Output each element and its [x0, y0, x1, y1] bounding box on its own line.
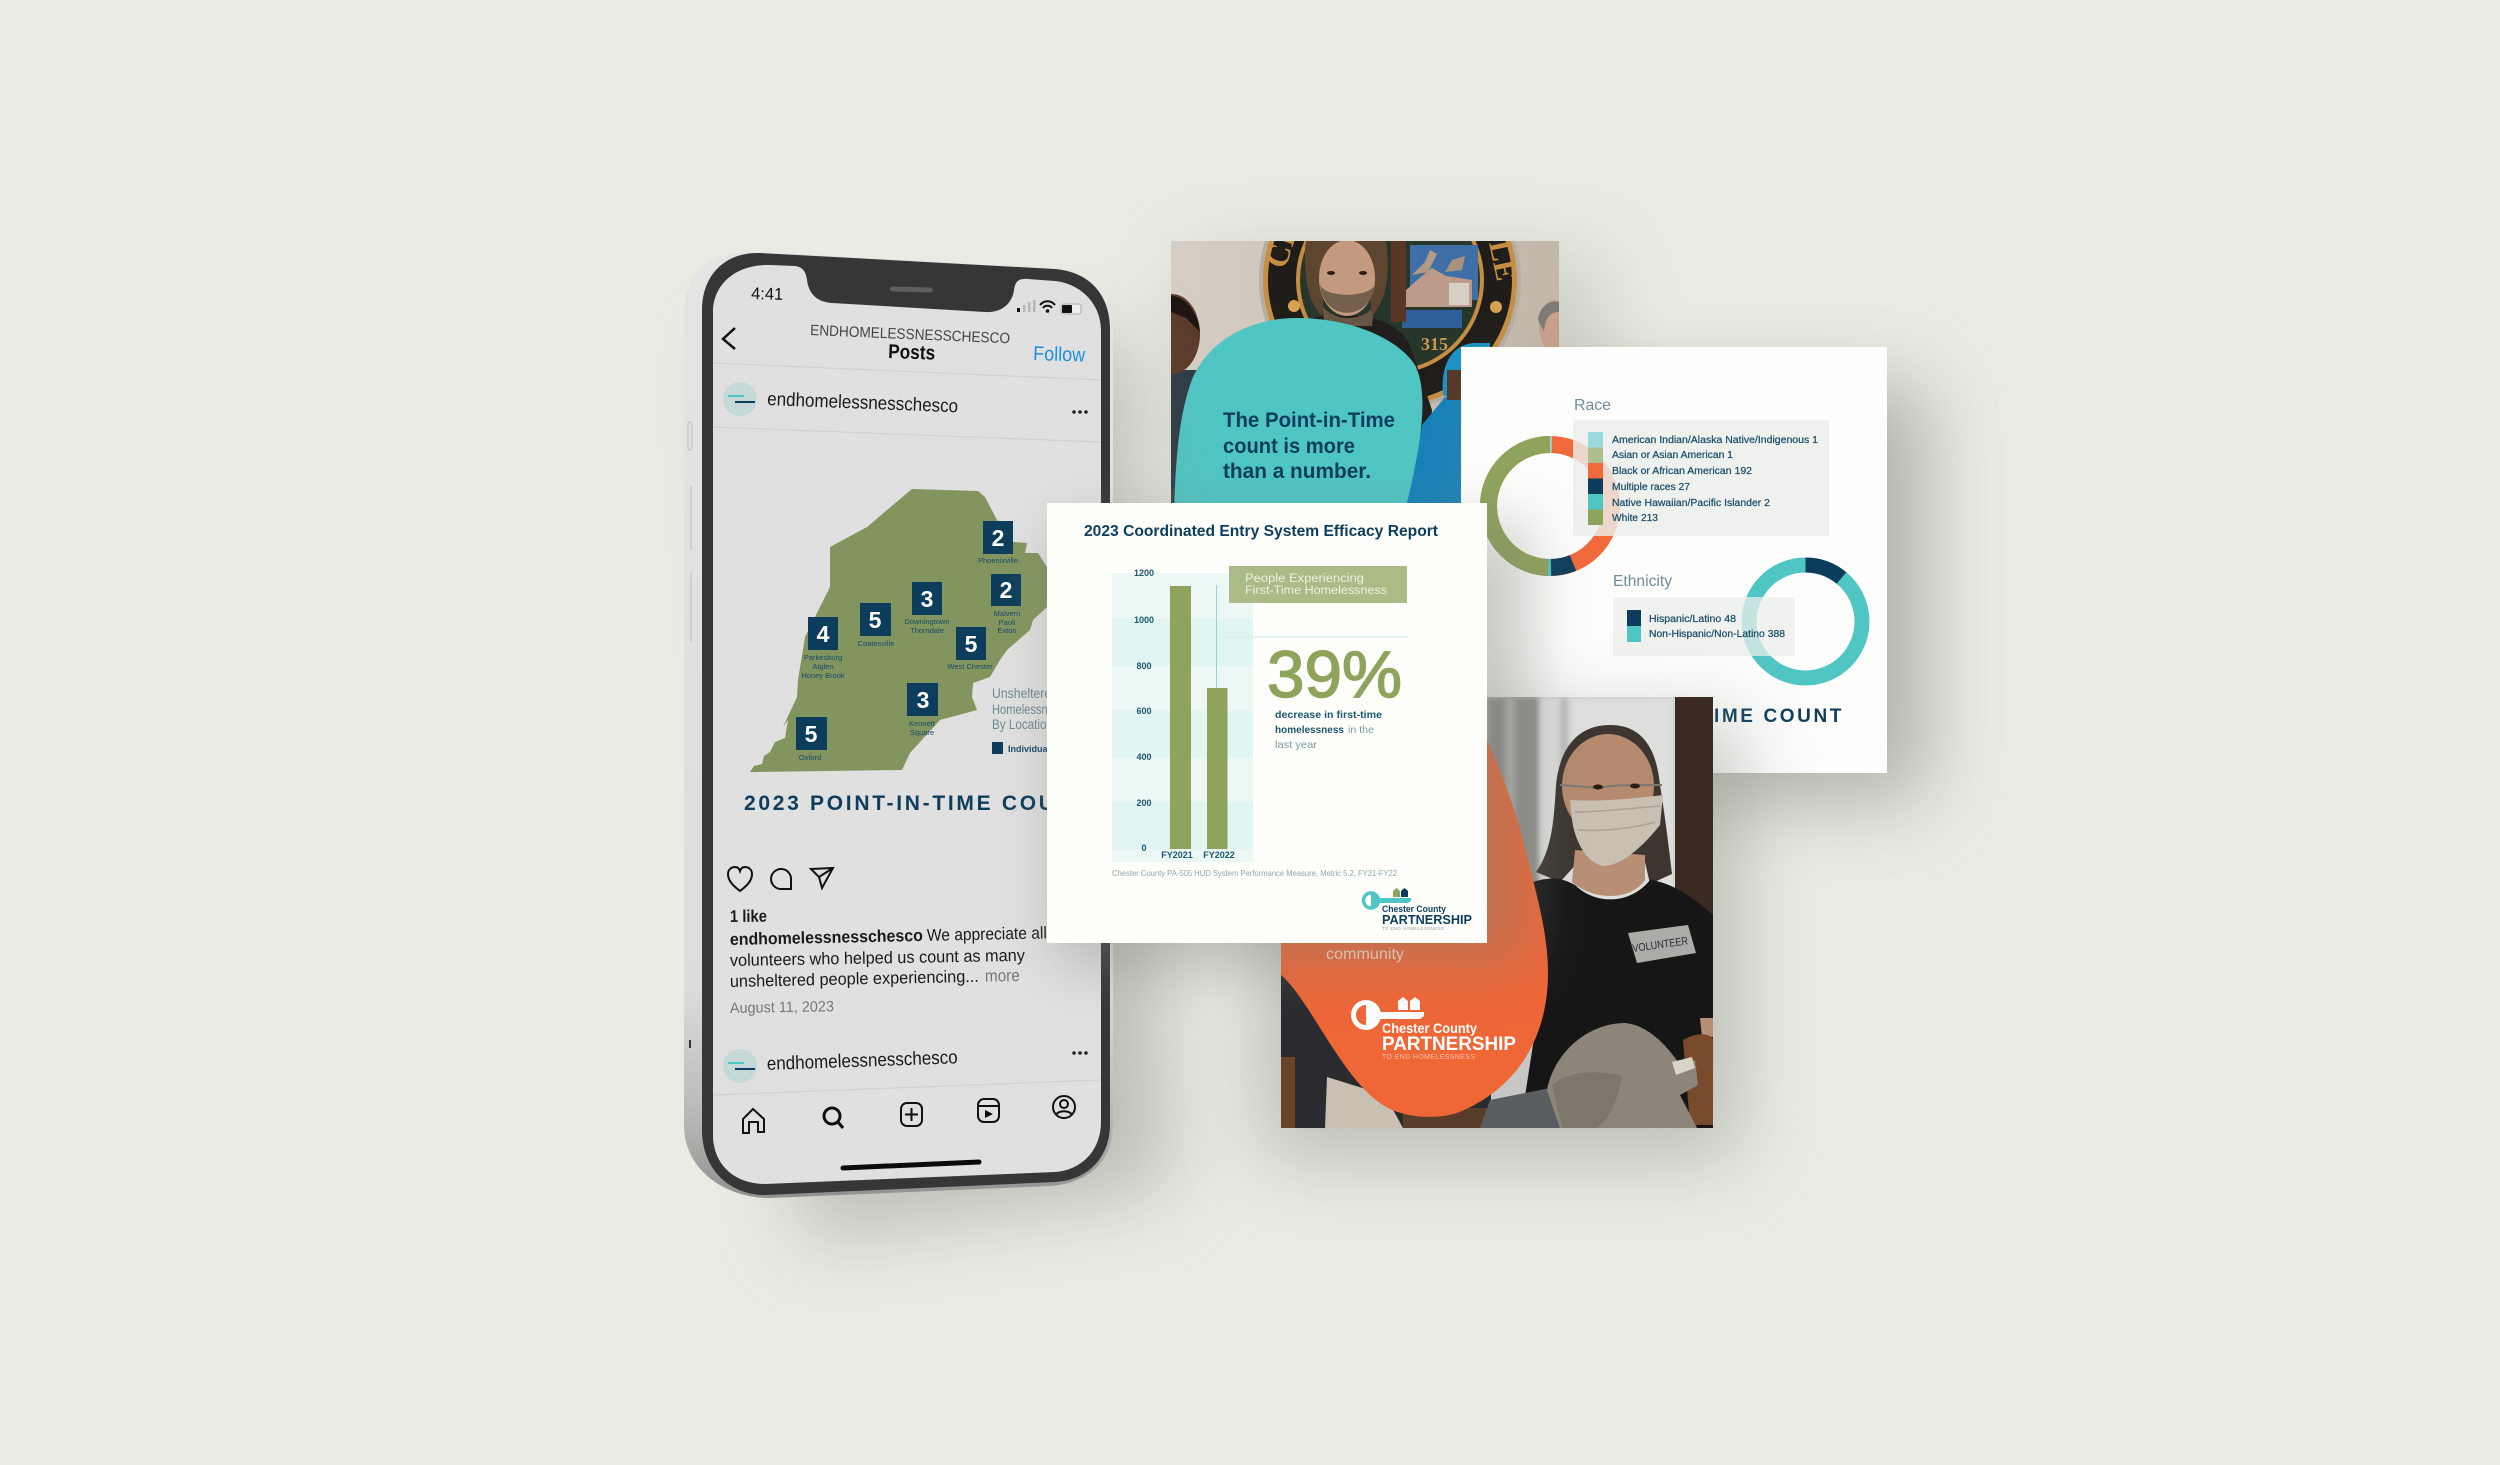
- post caption: [730, 907, 1047, 1017]
- post author row: [723, 382, 1088, 417]
- icon: city seal: LE: [1482, 238, 1523, 284]
- icon: comment: [771, 869, 791, 889]
- map marker: Parkesburg: Atglen: [812, 662, 834, 671]
- bar: FY2021: [1170, 586, 1191, 849]
- text: point-in-time statement: count is more: [1223, 435, 1355, 458]
- map marker: Malvern: Paoli: [999, 618, 1016, 627]
- phone mockup: [684, 252, 1113, 1198]
- bar chart: FY2022: [1203, 850, 1235, 860]
- legend: ethnicity: [1613, 597, 1795, 656]
- donut chart: race: [1478, 444, 1612, 568]
- woman in blue: [1405, 343, 1490, 511]
- legend: race: Native Hawaiian/Pacific Islander 2: [1612, 498, 1770, 509]
- icon: city seal: [1259, 241, 1521, 404]
- bar chart: FY2021: [1161, 850, 1193, 860]
- map marker: Downingtown: Downingtown: [904, 617, 950, 626]
- bar chart: 1200: [1134, 568, 1154, 578]
- callout: chart label: [1229, 566, 1407, 603]
- legend: race: Multiple races 27: [1612, 482, 1690, 493]
- bar chart: 1000: [1134, 615, 1154, 625]
- header: Follow: [1033, 343, 1086, 367]
- map marker: Coatesville: 5: [869, 607, 882, 633]
- card shadow: efficacy report: [1055, 525, 1530, 965]
- post caption: unsheltered people experiencing...: [730, 967, 979, 991]
- man in centre: [1305, 241, 1432, 435]
- stat description: [1275, 709, 1382, 751]
- map marker: Malvern: Malvern: [994, 609, 1020, 618]
- logo: white partnership key: Chester County: [1382, 1020, 1477, 1036]
- panel: efficacy report: [1047, 503, 1487, 943]
- post author row: endhomelessnesschesco: [767, 389, 958, 417]
- bar chart: 200: [1136, 798, 1152, 808]
- logo: white partnership key: [1354, 997, 1516, 1061]
- map marker: Kennett Square: Square: [910, 728, 934, 737]
- map marker: Kennett Square: 3: [917, 687, 929, 713]
- phone shadow: [730, 340, 1170, 1240]
- phone screen: [713, 265, 1101, 1184]
- map marker: West Chester: 5: [965, 631, 978, 657]
- map marker: Oxford: Oxford: [799, 753, 821, 762]
- legend: race: White 213: [1612, 513, 1658, 524]
- logo: partnership key: Chester County: [1382, 904, 1447, 915]
- map marker: Coatesville: [858, 603, 894, 648]
- text: point-in-time statement: The Point-in-Time: [1223, 409, 1395, 432]
- bar chart: [1112, 568, 1407, 862]
- bottom navigation icons: [743, 1096, 1075, 1133]
- map marker: Parkesburg: 4: [817, 621, 830, 647]
- map marker: Oxford: [796, 717, 827, 762]
- next post author row: [713, 1047, 1101, 1095]
- post caption: more: [985, 966, 1020, 986]
- header: ENDHOMELESSNESSCHESCO: [810, 322, 1010, 347]
- status bar: 4:41: [751, 284, 783, 304]
- speaker: [890, 286, 933, 293]
- logo: white partnership key: PARTNERSHIP: [1382, 1034, 1516, 1055]
- callout: chart label: First-Time Homelessness: [1245, 585, 1387, 597]
- map marker: Parkesburg: Parkesburg: [804, 653, 842, 662]
- man on the right: [1538, 300, 1559, 347]
- bar chart: 400: [1136, 752, 1152, 762]
- header: [713, 322, 1101, 442]
- bar chart: 600: [1136, 706, 1152, 716]
- logo: white partnership key: TO END HOMELESSNESS: [1382, 1054, 1475, 1061]
- map marker: Phoenixville: Phoenixville: [978, 556, 1018, 565]
- map legend: Unsheltered: [992, 686, 1058, 701]
- bar chart: 800: [1136, 661, 1152, 671]
- map legend: [992, 686, 1065, 754]
- stat description: last year: [1275, 739, 1318, 751]
- card shadow: portrait photo: [1185, 255, 1605, 525]
- map marker: Phoenixville: [978, 521, 1018, 565]
- map marker: Malvern: Exton: [997, 626, 1017, 635]
- logo: partnership key: TO END HOMELESSNESS: [1382, 926, 1444, 931]
- panel: point-in-time photo card: [1171, 241, 1559, 503]
- map marker: Downingtown: 3: [921, 586, 933, 612]
- map marker: West Chester: [947, 627, 993, 671]
- map marker: Oxford: 5: [805, 721, 818, 747]
- icon: share: [811, 868, 833, 888]
- map legend: Individuals: [1008, 744, 1055, 754]
- bar: FY2022: [1207, 688, 1228, 849]
- phone frame: [702, 253, 1110, 1195]
- card shadow: volunteer photo: [1260, 720, 1740, 1160]
- woman volunteer: [1520, 725, 1713, 1128]
- text: community: community: [1326, 946, 1404, 963]
- map marker: Downingtown: [904, 582, 950, 635]
- logo: partnership key: PARTNERSHIP: [1382, 912, 1472, 927]
- home indicator: [843, 1162, 979, 1168]
- map marker: Coatesville: Coatesville: [858, 639, 894, 648]
- curtain background: [1487, 697, 1713, 1100]
- map legend: Homelessness: [992, 702, 1065, 717]
- map marker: Kennett Square: Kennett: [909, 719, 936, 728]
- dark foreground at lower left: [1281, 975, 1491, 1128]
- map title: 2023 POINT-IN-TIME COUNT: [744, 792, 1090, 815]
- heading: ethnicity: Ethnicity: [1613, 573, 1672, 590]
- icon: heart: [728, 867, 752, 891]
- panel: demographics charts: [1461, 347, 1887, 773]
- icon: city seal: CI: [1257, 227, 1303, 272]
- icon: city seal: 315: [1421, 334, 1448, 354]
- panel: volunteer photo card: [1281, 697, 1713, 1128]
- next post author row: endhomelessnesschesco: [766, 1047, 958, 1075]
- map marker: Parkesburg: Honey Brook: [801, 671, 845, 680]
- map marker: West Chester: West Chester: [947, 662, 993, 671]
- map marker: Malvern: [991, 574, 1021, 635]
- basket: [1480, 1088, 1560, 1128]
- logo: partnership key: [1364, 888, 1472, 931]
- volunteer name badge: VOLUNTEER: [1632, 935, 1689, 955]
- post caption: endhomelessnesschesco: [730, 926, 923, 949]
- text: point-in-time statement: [1223, 412, 1394, 478]
- legend: race: [1573, 420, 1829, 536]
- map legend: By Location: [992, 717, 1053, 732]
- stuffed animals: [1547, 1023, 1713, 1128]
- volunteer name badge: [1628, 925, 1696, 963]
- source note: Chester County PA-505 HUD System Performance Measure, Metric 5.2, FY21-FY22: [1112, 869, 1398, 878]
- card shadow: demographics panel: [1500, 385, 1925, 800]
- legend: race: Black or African American 192: [1612, 466, 1752, 477]
- post caption: August 11, 2023: [730, 998, 834, 1017]
- orange blob: [1281, 700, 1548, 1117]
- text: point-in-time statement: than a number.: [1223, 460, 1371, 483]
- map marker: Phoenixville: 2: [992, 525, 1004, 551]
- stat description: in the: [1348, 724, 1374, 736]
- map of Chester County: [750, 489, 1060, 772]
- post caption: We appreciate all: [927, 923, 1047, 945]
- legend: race: American Indian/Alaska Native/Indigenous 1: [1612, 435, 1818, 446]
- legend: ethnicity: Hispanic/Latino 48: [1649, 614, 1736, 625]
- heading: race: Race: [1574, 397, 1611, 414]
- donut chart: ethnicity: [1749, 565, 1862, 678]
- legend: race: Asian or Asian American 1: [1612, 450, 1733, 461]
- phone body: [684, 252, 1113, 1198]
- man on the left: [1171, 294, 1200, 503]
- stat description: homelessness: [1275, 724, 1344, 736]
- teal blob: [1174, 318, 1422, 511]
- map marker: Parkesburg: [801, 617, 845, 680]
- post caption: volunteers who helped us count as many: [730, 946, 1026, 970]
- big stat: 39%: 39%: [1267, 637, 1402, 711]
- bar chart: 0: [1141, 843, 1147, 853]
- stat description: decrease in first-time: [1275, 709, 1382, 721]
- side buttons: [688, 422, 692, 1048]
- map marker: Downingtown: Thorndale: [910, 626, 944, 635]
- callout: chart label: People Experiencing: [1245, 573, 1364, 585]
- header: Posts: [888, 341, 936, 365]
- map marker: Kennett Square: [907, 683, 938, 737]
- legend: ethnicity: Non-Hispanic/Non-Latino 388: [1649, 629, 1785, 640]
- heading: report title: 2023 Coordinated Entry System Efficacy Report: [1084, 523, 1439, 540]
- post caption: 1 like: [730, 907, 767, 926]
- status bar: [751, 284, 1081, 314]
- map marker: Malvern: 2: [1000, 577, 1012, 603]
- heading: count caption: POINT-IN-TIME COUNT: [1588, 706, 1844, 727]
